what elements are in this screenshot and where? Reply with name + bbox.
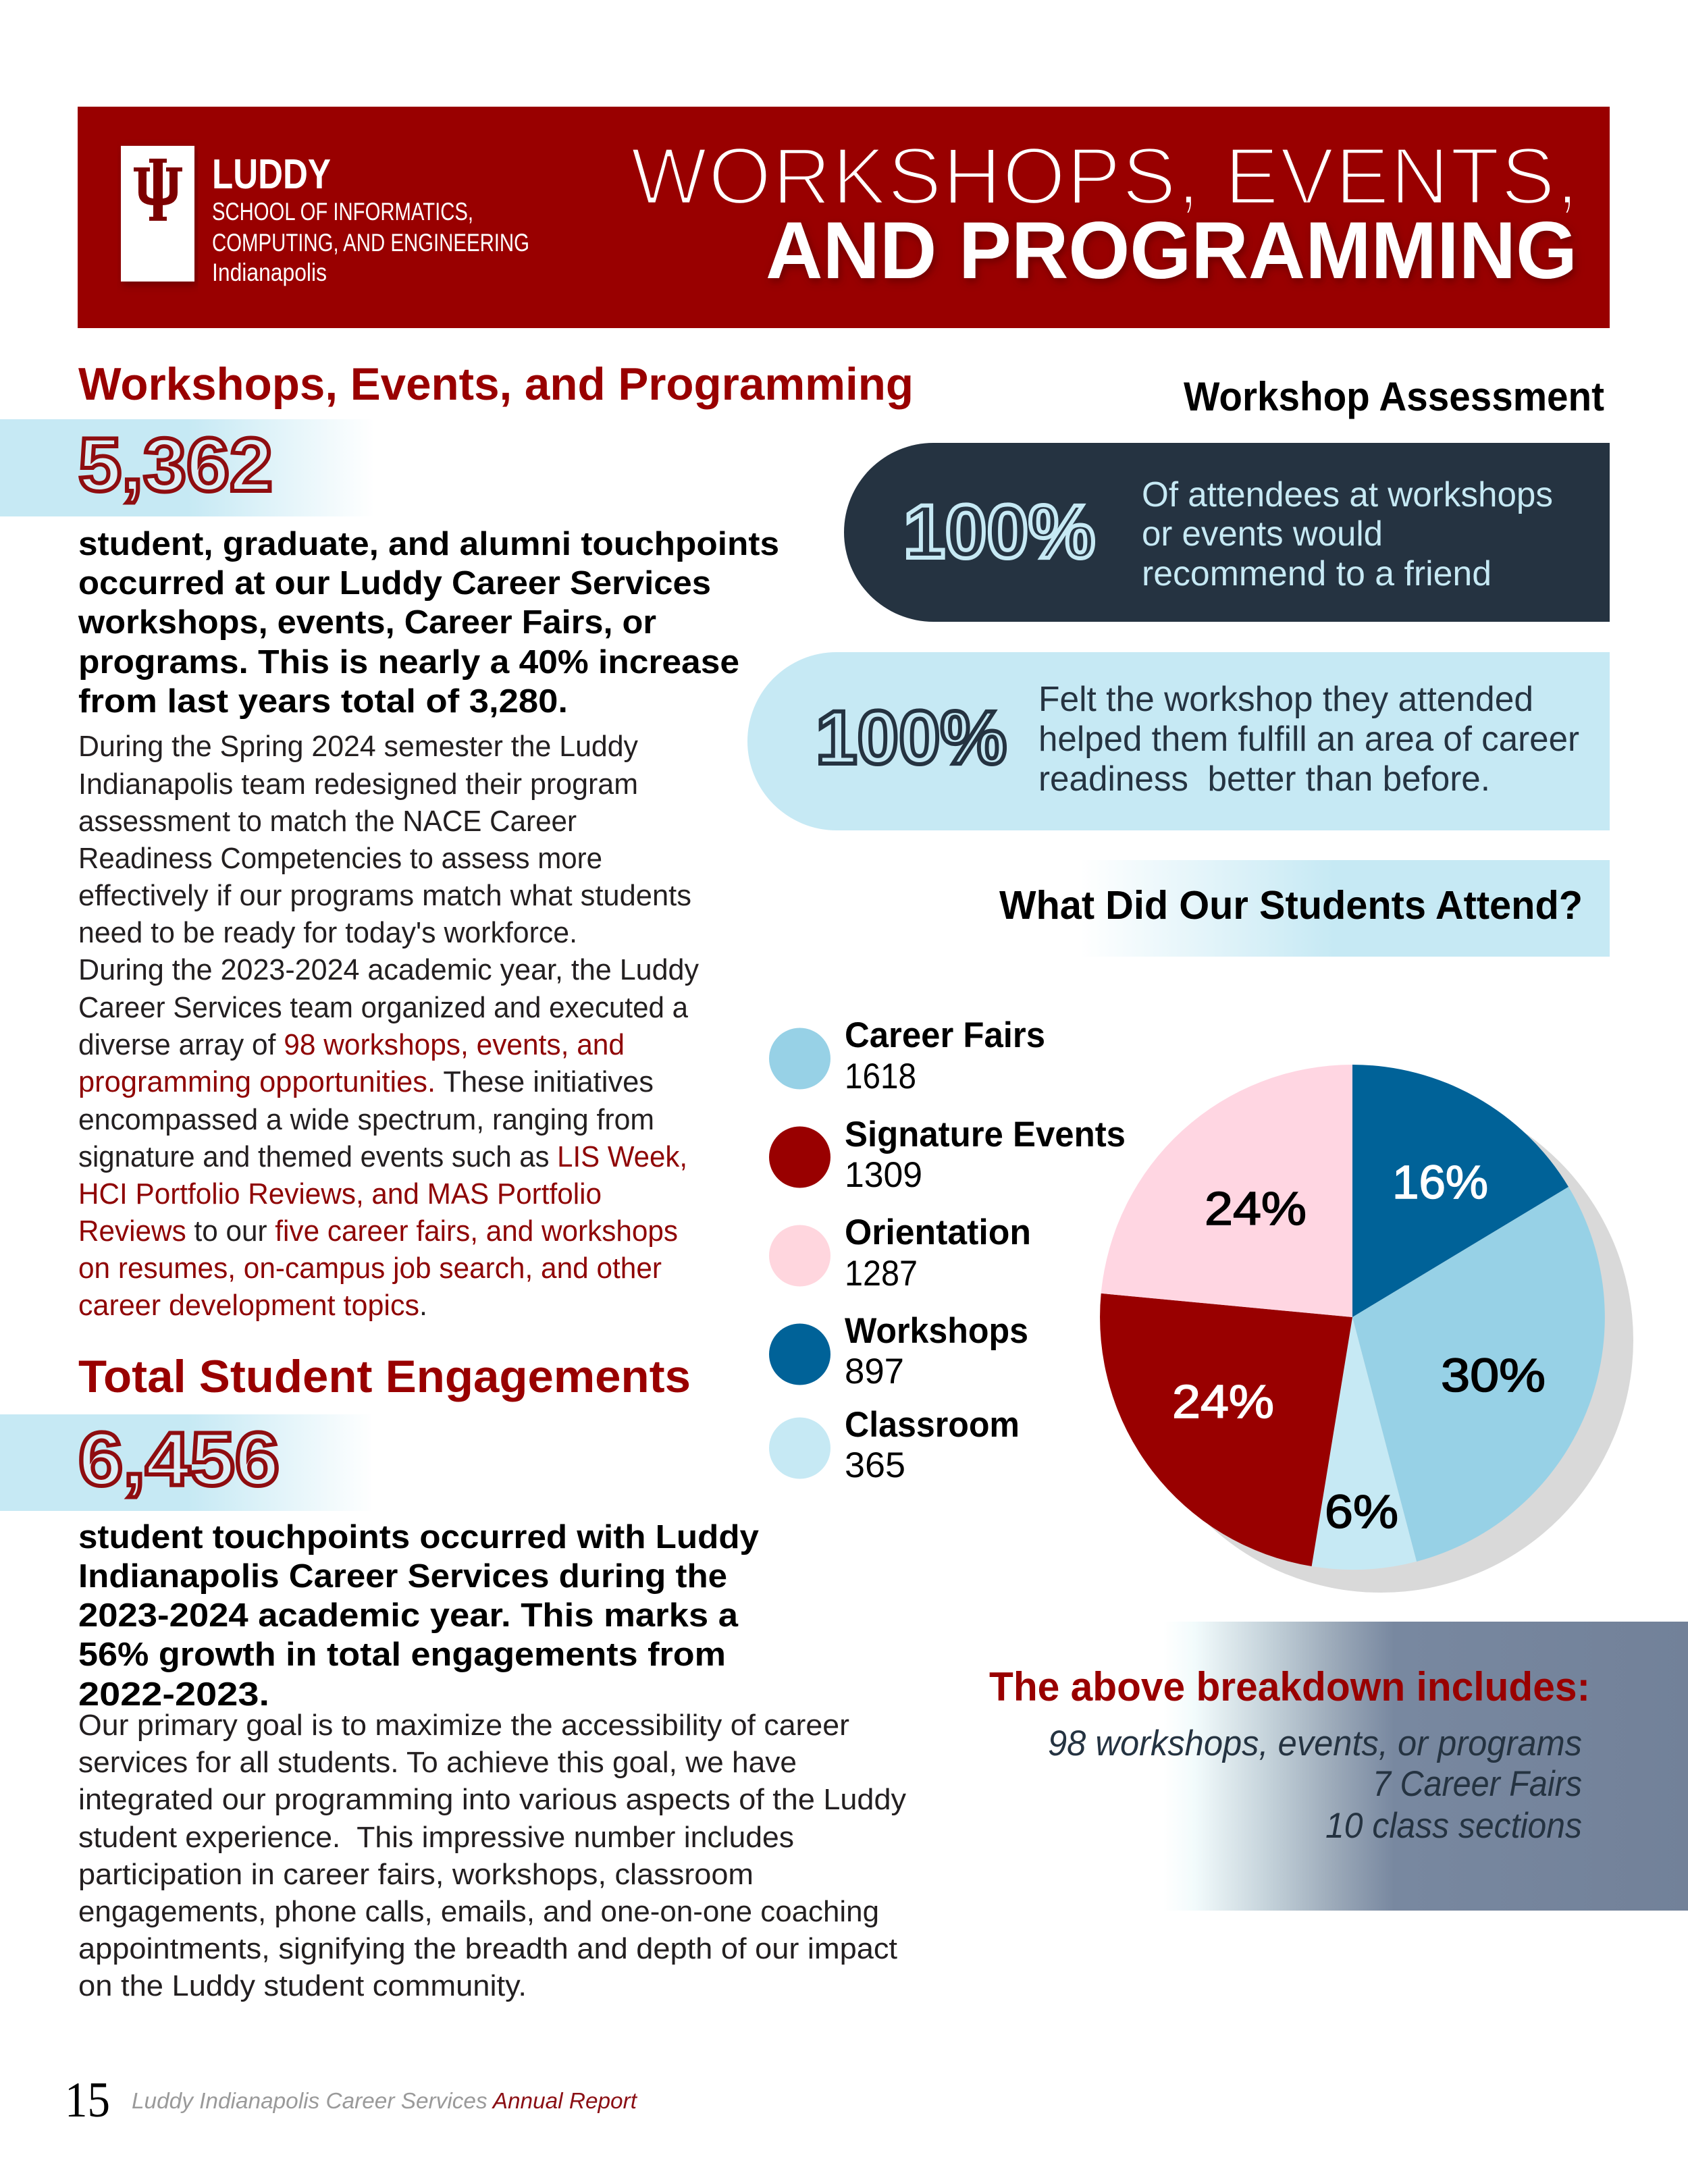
body text: program redesign and events: assessment to match the NACE Career: [78, 805, 577, 838]
logo: IU trident mark: [121, 146, 194, 282]
header banner: [78, 107, 1610, 328]
bold text: engagement growth: Indianapolis Career Services during the: [78, 1558, 727, 1595]
breakdown list: [1048, 1724, 1582, 1846]
legend: [769, 1015, 1126, 1485]
bold text: touchpoints summary: from last years total of 3,280.: [78, 683, 568, 720]
body text: accessibility goal: integrated our programming into various aspects of the Luddy: [78, 1783, 906, 1816]
body text: program redesign and events: signature and themed events such as LIS Week,: [78, 1140, 687, 1173]
legend item: orientation: [769, 1213, 1031, 1294]
bold text: touchpoints summary: student, graduate, and alumni touchpoints: [78, 526, 779, 562]
pie chart: [1100, 1065, 1633, 1593]
breakdown list: 98 workshops, events, or programs: [1048, 1724, 1582, 1763]
legend item: career fairs: Career Fairs: [845, 1015, 1045, 1055]
panel: career readiness stat: [747, 652, 1610, 830]
banner title: WORKSHOPS, EVENTS,: [631, 131, 1579, 221]
recommend description: or events would: [1142, 514, 1383, 554]
footer label: Luddy Indianapolis Career Services Annual Report: [132, 2088, 638, 2113]
legend item: workshops: [769, 1311, 1028, 1391]
readiness description: [1038, 680, 1579, 799]
heading: workshops, events, and programming: Workshops, Events, and Programming: [78, 358, 914, 410]
body text: program redesign and events: Reviews to our five career fairs, and workshops: [78, 1215, 678, 1248]
body text: program redesign and events: Career Services team organized and executed a: [78, 991, 689, 1024]
legend item: signature events: 1309: [845, 1155, 922, 1195]
heading band: what did our students attend: [999, 860, 1610, 957]
pie percentage labels: [1172, 1156, 1546, 1538]
bold text: engagement growth: 2022-2023.: [78, 1676, 269, 1713]
recommend description: recommend to a friend: [1142, 554, 1492, 593]
stat band: 5,362: [0, 419, 375, 516]
pie percentage labels: 24%: [1172, 1375, 1274, 1428]
legend item: career fairs: 1618: [845, 1057, 916, 1096]
body text: program redesign and events: Readiness Competencies to assess more: [78, 842, 602, 875]
breakdown list: 7 Career Fairs: [1373, 1764, 1582, 1804]
body text: program redesign and events: on resumes, on-campus job search, and other: [78, 1252, 662, 1285]
stat band: 5,362: 5,362: [78, 423, 273, 507]
body text: program redesign and events: [78, 730, 699, 1322]
body text: program redesign and events: programming opportunities. These initiatives: [78, 1065, 654, 1098]
logo wordmark: LUDDY: [212, 151, 331, 198]
footer: [65, 2073, 638, 2128]
bold text: engagement growth: [78, 1519, 759, 1713]
legend item: orientation: Orientation: [845, 1213, 1031, 1252]
body text: accessibility goal: appointments, signifying the breadth and depth of our impact: [78, 1932, 897, 1965]
body text: program redesign and events: diverse array of 98 workshops, events, and: [78, 1028, 625, 1061]
legend item: workshops: 897: [845, 1352, 904, 1391]
pie percentage labels: 16%: [1392, 1156, 1488, 1208]
logo wordmark: Indianapolis: [212, 259, 327, 286]
slice: workshops: [1352, 1065, 1568, 1317]
readiness description: Felt the workshop they attended: [1038, 680, 1533, 719]
legend item: signature events: [769, 1115, 1126, 1195]
breakdown list: 10 class sections: [1325, 1806, 1582, 1846]
stat: 100%: 100%: [903, 489, 1095, 574]
stat band: 6,456: 6,456: [78, 1417, 280, 1501]
pie percentage labels: 6%: [1325, 1485, 1398, 1538]
legend item: orientation: 1287: [845, 1254, 918, 1294]
legend item: classroom: Classroom: [845, 1405, 1020, 1445]
body text: program redesign and events: Indianapolis team redesigned their program: [78, 768, 638, 801]
recommend description: Of attendees at workshops: [1142, 475, 1553, 514]
bold text: touchpoints summary: workshops, events, Career Fairs, or: [78, 604, 656, 641]
legend item: workshops: Workshops: [845, 1311, 1028, 1351]
readiness description: helped them fulfill an area of career: [1038, 720, 1579, 759]
legend item: classroom: 365: [845, 1445, 905, 1485]
slice: career fairs: [1352, 1187, 1605, 1562]
body text: accessibility goal: student experience. This impressive number includes: [78, 1821, 794, 1854]
slice: classroom: [1312, 1317, 1417, 1570]
stat band: 6,456: [0, 1414, 371, 1511]
heading band: what did our students attend: What Did Our Students Attend?: [999, 883, 1583, 928]
logo wordmark: [212, 151, 529, 286]
recommend description: [1142, 475, 1553, 593]
banner title: AND PROGRAMMING: [766, 205, 1577, 296]
panel: recommend stat: [844, 443, 1610, 622]
heading: workshop assessment: Workshop Assessment: [1184, 374, 1604, 419]
body text: program redesign and events: During the 2023-2024 academic year, the Luddy: [78, 953, 699, 986]
logo wordmark: SCHOOL OF INFORMATICS,: [212, 198, 473, 225]
body text: accessibility goal: [78, 1709, 906, 2002]
breakdown heading: The above breakdown includes:: [989, 1664, 1590, 1709]
slice: orientation: [1101, 1065, 1352, 1317]
bold text: touchpoints summary: programs. This is nearly a 40% increase: [78, 644, 739, 681]
slice: signature events: [1100, 1294, 1352, 1566]
heading: total student engagements: Total Student Engagements: [78, 1351, 691, 1402]
body text: program redesign and events: encompassed a wide spectrum, ranging from: [78, 1103, 654, 1136]
pie percentage labels: 24%: [1205, 1182, 1307, 1235]
body text: accessibility goal: services for all students. To achieve this goal, we have: [78, 1746, 797, 1779]
body text: accessibility goal: participation in career fairs, workshops, classroom: [78, 1858, 754, 1891]
body text: program redesign and events: During the Spring 2024 semester the Luddy: [78, 730, 638, 763]
body text: program redesign and events: HCI Portfolio Reviews, and MAS Portfolio: [78, 1177, 602, 1210]
legend item: career fairs: [769, 1015, 1045, 1096]
body text: program redesign and events: need to be ready for today's workforce.: [78, 916, 577, 949]
body text: program redesign and events: effectively if our programs match what students: [78, 879, 691, 912]
legend item: classroom: [769, 1405, 1020, 1485]
bold text: engagement growth: student touchpoints occurred with Luddy: [78, 1519, 759, 1555]
pie percentage labels: 30%: [1441, 1349, 1546, 1402]
bold text: touchpoints summary: occurred at our Luddy Career Services: [78, 565, 711, 602]
stat: 100%: 100%: [816, 695, 1007, 780]
body text: accessibility goal: on the Luddy student community.: [78, 1969, 527, 2002]
page number: 15: [65, 2073, 110, 2128]
bold text: touchpoints summary: [78, 526, 779, 720]
panel: breakdown: [989, 1622, 1688, 1911]
banner title: [631, 131, 1579, 296]
body text: accessibility goal: engagements, phone calls, emails, and one-on-one coaching: [78, 1895, 879, 1928]
bold text: engagement growth: 2023-2024 academic year. This marks a: [78, 1597, 739, 1634]
body text: accessibility goal: Our primary goal is to maximize the accessibility of career: [78, 1709, 849, 1742]
logo wordmark: COMPUTING, AND ENGINEERING: [212, 229, 529, 257]
legend item: signature events: Signature Events: [845, 1115, 1126, 1154]
bold text: engagement growth: 56% growth in total engagements from: [78, 1636, 726, 1673]
body text: program redesign and events: career development topics.: [78, 1289, 427, 1322]
readiness description: readiness better than before.: [1038, 760, 1490, 799]
